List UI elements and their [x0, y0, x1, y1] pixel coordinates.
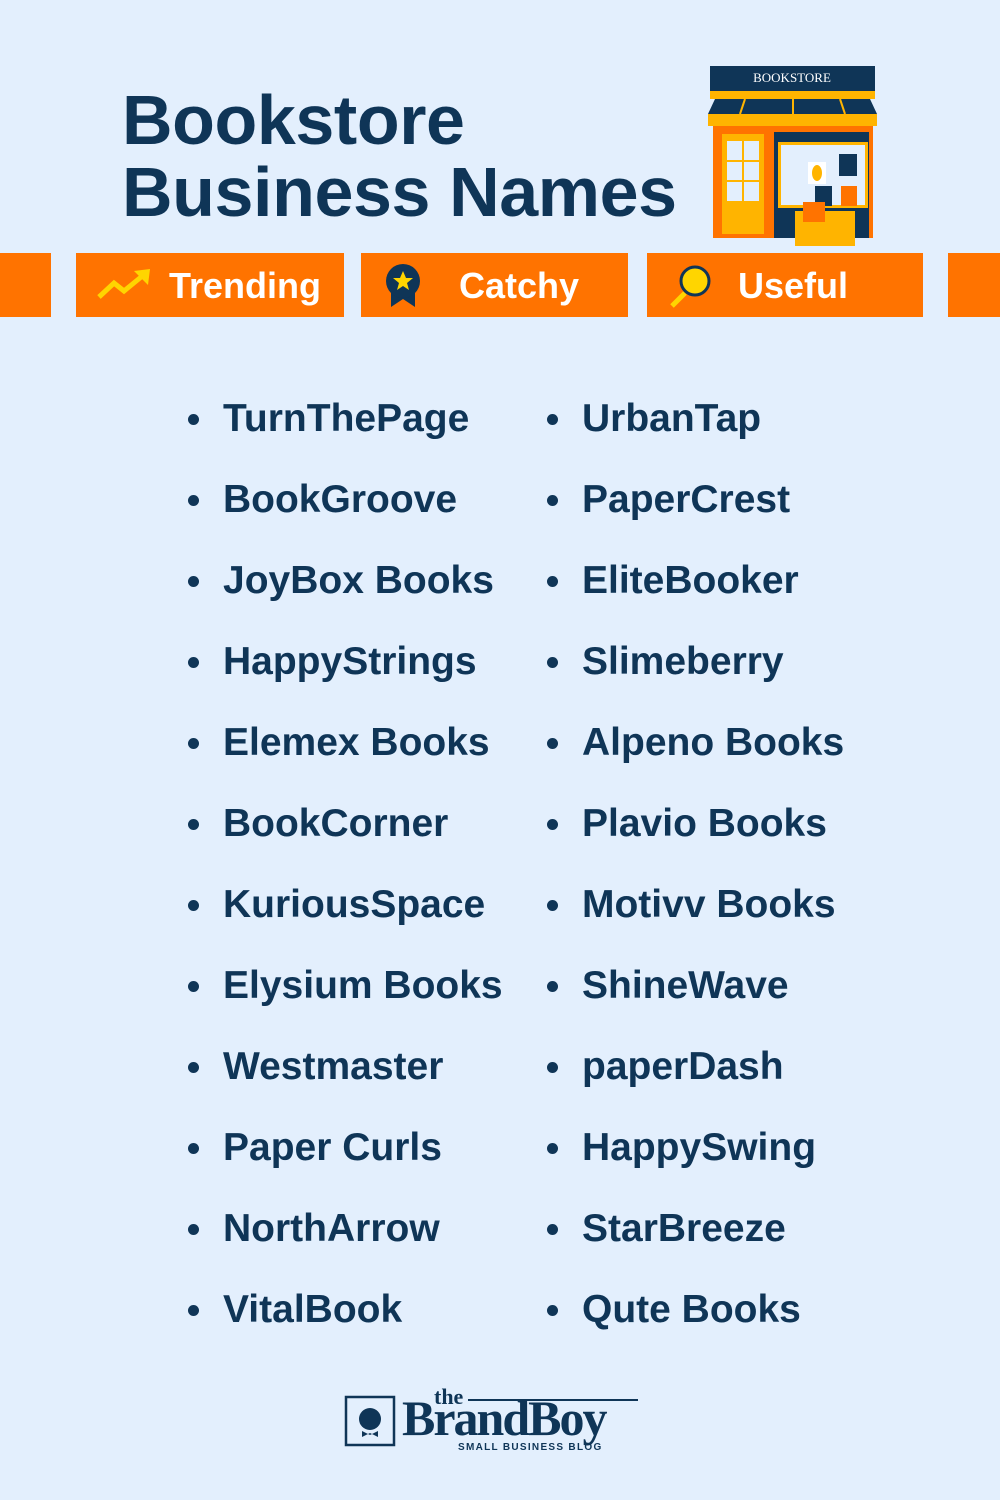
list: column 2: StarBreeze	[582, 1207, 786, 1250]
list: column 2	[547, 397, 844, 1331]
list: column 2: Slimeberry	[582, 640, 784, 683]
list: column 1: Elysium Books	[223, 964, 503, 1007]
title: Business Names	[122, 153, 677, 231]
list: column 1: NorthArrow	[223, 1207, 440, 1250]
list: column 1: BookGroove	[223, 478, 457, 521]
list: column 2: EliteBooker	[582, 559, 799, 602]
list: column 1: JoyBox Books	[223, 559, 494, 602]
banner tab: Trending: Trending	[169, 265, 321, 306]
list: column 2: UrbanTap	[582, 397, 761, 440]
list: column 1: VitalBook	[223, 1288, 402, 1331]
icon: magnifier	[670, 266, 710, 308]
list: column 2: Motivv Books	[582, 883, 836, 926]
list: column 2: Qute Books	[582, 1288, 801, 1331]
list: column 2: Plavio Books	[582, 802, 827, 845]
logo: theBrandBoy	[344, 1384, 638, 1453]
list: column 1: BookCorner	[223, 802, 448, 845]
list: column 2: ShineWave	[582, 964, 789, 1007]
title	[122, 81, 677, 231]
list: column 1: HappyStrings	[223, 640, 477, 683]
list: column 1: Westmaster	[223, 1045, 443, 1088]
banner tab: Useful	[647, 253, 923, 317]
logo icon	[344, 1396, 396, 1446]
icon: bookstore: BOOKSTORE	[753, 70, 831, 85]
banner: left stub	[0, 253, 51, 317]
list: column 2: Alpeno Books	[582, 721, 844, 764]
logo: theBrandBoy: the	[434, 1384, 463, 1409]
list: column 1: Elemex Books	[223, 721, 490, 764]
list: column 2: HappySwing	[582, 1126, 816, 1169]
icon: bookstore	[708, 66, 877, 246]
list: column 1	[188, 397, 503, 1331]
banner: right stub	[948, 253, 1000, 317]
banner tab: Catchy	[361, 253, 628, 317]
list: column 2: PaperCrest	[582, 478, 790, 521]
banner tab: Useful: Useful	[738, 265, 848, 306]
list: column 1: Paper Curls	[223, 1126, 442, 1169]
logo: theBrandBoy: BrandBoy	[402, 1390, 606, 1446]
list: column 1: TurnThePage	[223, 397, 469, 440]
title: Bookstore	[122, 81, 465, 159]
icon: badge star	[386, 264, 420, 307]
list: column 2: paperDash	[582, 1045, 784, 1088]
icon: trend arrow	[97, 269, 150, 299]
list: column 1: KuriousSpace	[223, 883, 485, 926]
logo: theBrandBoy: SMALL BUSINESS BLOG	[458, 1442, 603, 1453]
banner tab: Catchy: Catchy	[459, 265, 579, 306]
banner tab: Trending	[76, 253, 344, 317]
